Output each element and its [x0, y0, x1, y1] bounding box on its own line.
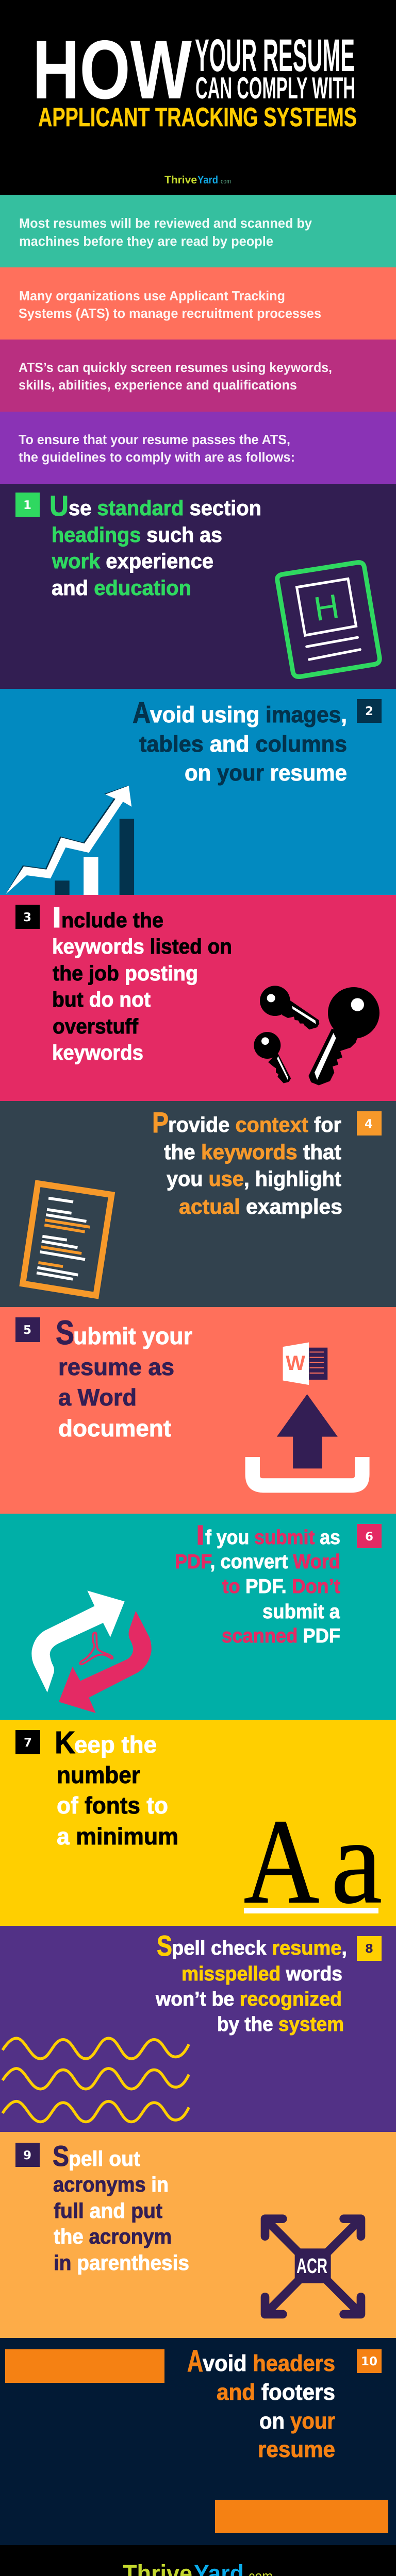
- step 7 text: number: [57, 1761, 140, 1788]
- logo: ThriveYard small: Yard: [197, 174, 218, 186]
- step 9 text: pell out: [69, 2147, 140, 2171]
- step 9 text: full and put: [54, 2199, 162, 2223]
- step 6 text: [175, 1520, 340, 1647]
- step 2 text: tables and columns: [139, 732, 347, 757]
- step 6 text: I: [196, 1520, 205, 1551]
- step 4 text: you use, highlight: [167, 1167, 341, 1191]
- step 3 text: keywords: [52, 1041, 143, 1064]
- step 7 text: a minimum: [57, 1823, 178, 1850]
- step 9 text: S: [53, 2140, 69, 2172]
- step 8 text: by the system: [217, 2013, 344, 2036]
- step 3 text: overstuff: [53, 1014, 138, 1038]
- badge 6: 6: [365, 1530, 373, 1544]
- panel: intro guidelines: [0, 412, 396, 484]
- footer bar: [215, 2500, 388, 2533]
- panel: step 4: [0, 1101, 396, 1307]
- icon: Aa typography: [244, 1794, 382, 1928]
- step 1 text: U: [50, 489, 69, 522]
- badge 8: 8: [365, 1942, 373, 1956]
- step 5 text: a Word: [58, 1384, 137, 1411]
- badge 9: 9: [23, 2149, 31, 2162]
- icon: document with heading: [277, 563, 380, 676]
- icon: Aa typography: a: [331, 1794, 382, 1928]
- badge 1: [15, 493, 40, 517]
- step 4 text: rovide context for: [168, 1113, 341, 1137]
- panel: intro machines: machines before they are read by people: [19, 233, 273, 249]
- title: [32, 23, 357, 132]
- badge 7: [15, 1730, 40, 1754]
- step 10 text: [187, 2344, 335, 2462]
- step 8 text: [155, 1929, 347, 2036]
- step 5 text: ubmit your: [73, 1323, 192, 1349]
- logo: ThriveYard small: .com: [219, 177, 231, 185]
- step 5 text: document: [58, 1415, 171, 1442]
- step 2 text: A: [133, 696, 151, 730]
- badge 6: [357, 1524, 382, 1548]
- step 4 text: the keywords that: [164, 1140, 341, 1164]
- badge 2: [357, 699, 382, 723]
- step 8 text: misspelled words: [182, 1963, 342, 1985]
- step 3 text: nclude the: [61, 908, 163, 932]
- logo: ThriveYard large: [123, 2560, 273, 2576]
- step 6 text: submit a: [262, 1601, 340, 1623]
- icon: document with heading: H: [311, 587, 341, 628]
- badge 10: 10: [361, 2355, 377, 2368]
- step 6 text: scanned PDF: [222, 1625, 340, 1647]
- step 1 text: headings such as: [52, 523, 222, 547]
- step 1 text: se standard section: [69, 496, 261, 520]
- step 4 text: P: [152, 1106, 169, 1139]
- step 9 text: in parenthesis: [54, 2251, 189, 2275]
- step 7 text: K: [55, 1725, 75, 1760]
- badge 5: 5: [23, 1324, 31, 1337]
- badge 5: [15, 1317, 40, 1342]
- step 2 text: on your resume: [185, 760, 347, 786]
- header bar: [5, 2349, 164, 2383]
- panel: intro screening: skills, abilities, experience and qualifications: [19, 377, 297, 393]
- panel: step 8: [0, 1926, 396, 2132]
- step 6 text: PDF, convert Word: [175, 1551, 340, 1573]
- panel: intro screening: [0, 340, 396, 412]
- panel: step 9: [0, 2132, 396, 2338]
- panel: step 2: [0, 689, 396, 895]
- step 8 text: S: [157, 1929, 172, 1962]
- step 10 text: A: [187, 2344, 203, 2378]
- badge 2: 2: [365, 705, 373, 718]
- title: HOW: [32, 23, 192, 116]
- badge 7: 7: [24, 1736, 32, 1750]
- panel: intro ATS: Many organizations use Applicant Tracking: [19, 288, 285, 303]
- step 10 text: void headers: [203, 2351, 335, 2376]
- icon: resume with highlighted lines: [23, 1183, 111, 1295]
- panel: footer: [0, 2545, 396, 2576]
- panel: step 6: [0, 1514, 396, 1720]
- icon: upload arrow and tray: [245, 1394, 370, 1493]
- panel: step 1: [0, 484, 396, 689]
- step 10 text: on your: [259, 2409, 335, 2434]
- panel: intro screening: ATS’s can quickly screen resumes using keywords,: [19, 360, 332, 375]
- step 3 text: I: [52, 901, 61, 934]
- panel: step 10: [0, 2338, 396, 2545]
- step 5 text: [56, 1313, 192, 1442]
- step 9 text: [53, 2140, 189, 2275]
- icon: three keys: [254, 986, 380, 1086]
- badge 9: [15, 2143, 40, 2167]
- icon: acronym expanding arrows: [265, 2219, 361, 2314]
- step 8 text: won’t be recognized: [155, 1988, 342, 2010]
- panel: intro machines: [0, 195, 396, 267]
- step 10 text: and footers: [217, 2380, 335, 2405]
- step 9 text: acronyms in: [53, 2173, 169, 2196]
- panel: title header: [0, 0, 396, 195]
- panel: intro guidelines: To ensure that your resume passes the ATS,: [19, 432, 290, 447]
- step 7 text: eep the: [74, 1731, 157, 1758]
- panel: intro guidelines: the guidelines to comply with are as follows:: [19, 449, 295, 465]
- step 10 text: resume: [258, 2437, 335, 2462]
- badge 10: [357, 2349, 382, 2373]
- icon: Word document: W: [286, 1352, 305, 1375]
- step 5 text: S: [56, 1313, 74, 1351]
- step 7 text: [55, 1725, 178, 1850]
- step 1 text: and education: [52, 576, 191, 600]
- step 2 text: [133, 696, 347, 786]
- step 3 text: the job posting: [53, 961, 198, 985]
- badge 4: 4: [365, 1117, 373, 1131]
- icon: Word document: [283, 1343, 327, 1385]
- logo: ThriveYard small: [164, 174, 231, 186]
- step 6 text: to PDF. Don’t: [222, 1575, 340, 1598]
- badge 3: [15, 905, 40, 929]
- step 4 text: [152, 1106, 342, 1218]
- step 5 text: resume as: [58, 1353, 174, 1380]
- logo: ThriveYard small: Thrive: [164, 174, 197, 186]
- icon: Aa typography: A: [244, 1794, 319, 1928]
- step 3 text: keywords listed on: [52, 935, 232, 958]
- step 4 text: actual examples: [179, 1195, 342, 1218]
- step 3 text: but do not: [52, 988, 151, 1011]
- step 8 text: pell check resume,: [172, 1937, 347, 1959]
- step 1 text: work experience: [52, 549, 213, 573]
- panel: step 3: [0, 895, 396, 1101]
- icon: acronym expanding arrows: ACR: [296, 2254, 327, 2278]
- icon: convert arrows with PDF symbol: [31, 1590, 152, 1713]
- panel: intro machines: Most resumes will be reviewed and scanned by: [19, 215, 312, 231]
- chart: rising arrow and bars: [6, 786, 134, 895]
- step 2 text: void using images,: [150, 702, 347, 727]
- panel: step 7: [0, 1720, 396, 1928]
- step 9 text: the acronym: [54, 2225, 172, 2248]
- step 3 text: [52, 901, 232, 1064]
- step 6 text: f you submit as: [205, 1527, 340, 1549]
- badge 4: [357, 1111, 382, 1136]
- badge 3: 3: [23, 911, 31, 924]
- panel: step 5: [0, 1307, 396, 1514]
- badge 8: [357, 1936, 382, 1961]
- step 7 text: of fonts to: [57, 1792, 168, 1819]
- badge 1: 1: [23, 499, 31, 512]
- panel: intro ATS: [0, 267, 396, 340]
- panel: intro ATS: Systems (ATS) to manage recruitment processes: [19, 306, 321, 321]
- step 1 text: [50, 489, 261, 600]
- icon: squiggly spell-check lines: [3, 2038, 189, 2122]
